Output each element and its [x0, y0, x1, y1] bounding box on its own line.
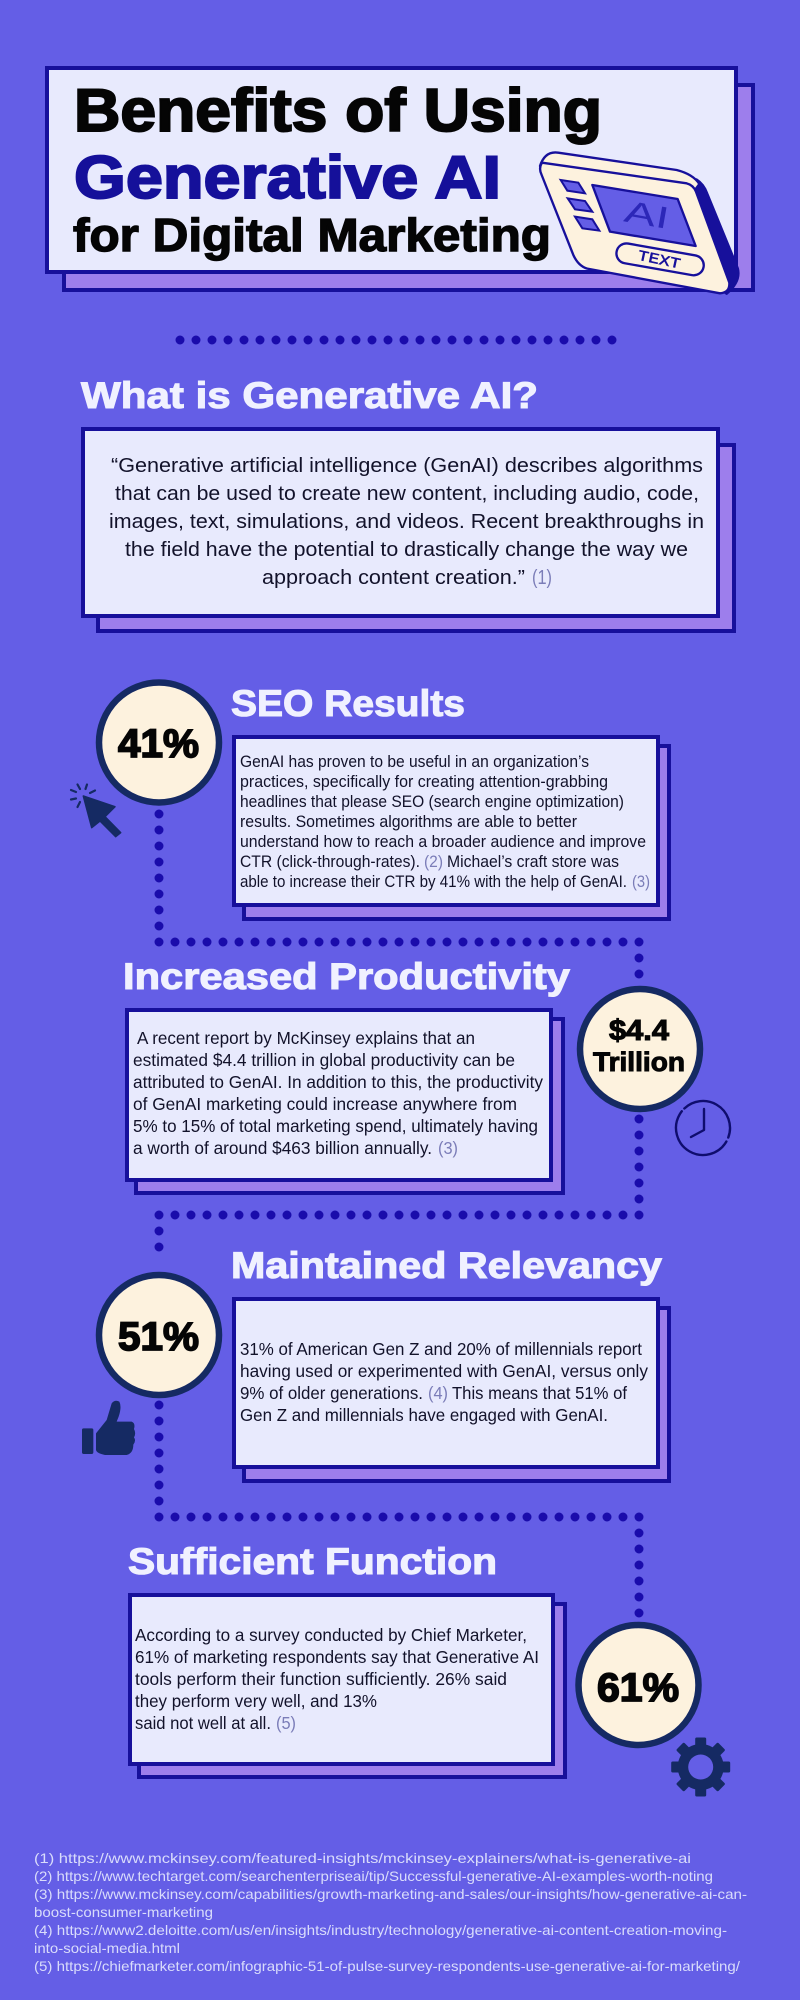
dotted connector: productivity to relevancy [159, 1119, 639, 1263]
heading: Maintained Relevancy: Maintained Relevancy [231, 1245, 662, 1286]
icon: AI text generator device: TEXT [636, 249, 682, 273]
relevancy body text: This means that 51% of [452, 1383, 627, 1403]
footnotes: source list: (5) https://chiefmarketer.com/infographic-51-of-pulse-survey-respondents-use-generative-ai-for-marketing/ [34, 1958, 740, 1974]
footnotes: source list: into-social-media.html [34, 1940, 180, 1956]
footnotes: source list: boost-consumer-marketing [34, 1904, 213, 1920]
relevancy body text [240, 1339, 648, 1425]
footnotes: source list: (4) https://www2.deloitte.com/us/en/insights/industry/technology/generative-ai-content-creation-moving- [34, 1922, 727, 1938]
heading: What is Generative AI?: What is Generative AI? [81, 375, 538, 416]
panel: SEO results [234, 737, 669, 919]
icon: clock [666, 1091, 740, 1165]
panel: definition quote [83, 429, 734, 631]
badge: $4.4 Trillion: Trillion [593, 1047, 685, 1077]
SEO body text: (3) [632, 873, 650, 891]
badge: $4.4 Trillion [580, 989, 700, 1109]
function body text: they perform very well, and 13% [135, 1691, 377, 1711]
footnotes: source list: (1) https://www.mckinsey.com/featured-insights/mckinsey-explainers/what-is-generative-ai [34, 1850, 691, 1866]
SEO body text: results. Sometimes algorithms are able to better [240, 813, 577, 831]
function body text: 61% of marketing respondents say that Generative AI [135, 1647, 539, 1667]
quote text: images, text, simulations, and videos. Recent breakthroughs in [109, 510, 704, 533]
badge: 51% [99, 1275, 219, 1395]
badge: $4.4 Trillion: $4.4 [609, 1015, 669, 1047]
quote text: approach content creation.” [262, 566, 525, 589]
relevancy body text: Gen Z and millennials have engaged with GenAI. [240, 1405, 608, 1425]
heading: SEO Results: SEO Results [231, 683, 465, 724]
SEO body text [240, 753, 650, 891]
productivity body text: 5% to 15% of total marketing spend, ultimately having [133, 1116, 538, 1136]
dotted connector: relevancy to function [159, 1405, 639, 1618]
title: Benefits of Using [74, 77, 602, 144]
badge: 61%: 61% [597, 1666, 679, 1710]
badge: 61% [578, 1625, 698, 1745]
icon: mouse cursor click [71, 784, 121, 837]
icon: gear [671, 1738, 730, 1796]
footnotes: source list: (3) https://www.mckinsey.com/capabilities/growth-marketing-and-sales/our-insights/how-generative-ai-can- [34, 1886, 747, 1902]
footnotes: source list [34, 1850, 747, 1974]
quote text: “Generative artificial intelligence (GenAI) describes algorithms [111, 454, 703, 477]
productivity body text: a worth of around $463 billion annually. [133, 1138, 432, 1158]
SEO body text: practices, specifically for creating attention-grabbing [240, 773, 608, 791]
relevancy body text: (4) [428, 1383, 448, 1403]
SEO body text: CTR (click-through-rates). [240, 853, 420, 871]
icon: thumbs up [82, 1401, 135, 1455]
quote text: that can be used to create new content, including audio, code, [115, 482, 699, 505]
badge: 41% [99, 682, 219, 802]
title: Generative AI [74, 144, 501, 211]
function body text: said not well at all. [135, 1713, 271, 1733]
function body text: According to a survey conducted by Chief Marketer, [135, 1625, 527, 1645]
SEO body text: (2) [424, 853, 443, 871]
productivity body text: attributed to GenAI. In addition to this, the productivity [133, 1072, 543, 1092]
heading: Increased Productivity: Increased Productivity [123, 956, 570, 997]
title: for Digital Marketing [73, 209, 551, 261]
panel: maintained relevancy [234, 1299, 669, 1481]
footnotes: source list: (2) https://www.techtarget.com/searchenterpriseai/tip/Successful-generative-AI-examples-worth-noting [34, 1868, 713, 1884]
panel: sufficient function [130, 1595, 565, 1777]
SEO body text: able to increase their CTR by 41% with the help of GenAI. [240, 873, 627, 891]
function body text [135, 1625, 539, 1733]
heading: Sufficient Function: Sufficient Function [128, 1541, 497, 1582]
SEO body text: understand how to reach a broader audience and improve [240, 833, 646, 851]
panel: title banner [47, 68, 753, 294]
productivity body text [133, 1028, 543, 1158]
SEO body text: Michael’s craft store was [447, 853, 619, 871]
function body text: tools perform their function sufficiently. 26% said [135, 1669, 507, 1689]
quote text: (1) [532, 566, 552, 589]
dotted connector: SEO to productivity [159, 814, 639, 975]
icon: AI text generator device: AI [622, 194, 672, 236]
relevancy body text: having used or experimented with GenAI, versus only [240, 1361, 648, 1381]
productivity body text: of GenAI marketing could increase anywhere from [133, 1094, 517, 1114]
relevancy body text: 31% of American Gen Z and 20% of millennials report [240, 1339, 642, 1359]
quote text: the field have the potential to drastically change the way we [125, 538, 688, 561]
badge: 51%: 51% [118, 1315, 199, 1359]
SEO body text: headlines that please SEO (search engine optimization) [240, 793, 624, 811]
productivity body text: (3) [438, 1138, 458, 1158]
badge: 41%: 41% [118, 722, 199, 766]
relevancy body text: 9% of older generations. [240, 1383, 423, 1403]
panel: increased productivity [127, 1010, 563, 1193]
function body text: (5) [276, 1713, 296, 1733]
quote text [109, 454, 704, 589]
productivity body text: A recent report by McKinsey explains that an [137, 1028, 475, 1048]
SEO body text: GenAI has proven to be useful in an organization’s [240, 753, 589, 771]
icon: AI text generator device [540, 152, 739, 294]
title [73, 77, 602, 261]
productivity body text: estimated $4.4 trillion in global productivity can be [133, 1050, 515, 1070]
